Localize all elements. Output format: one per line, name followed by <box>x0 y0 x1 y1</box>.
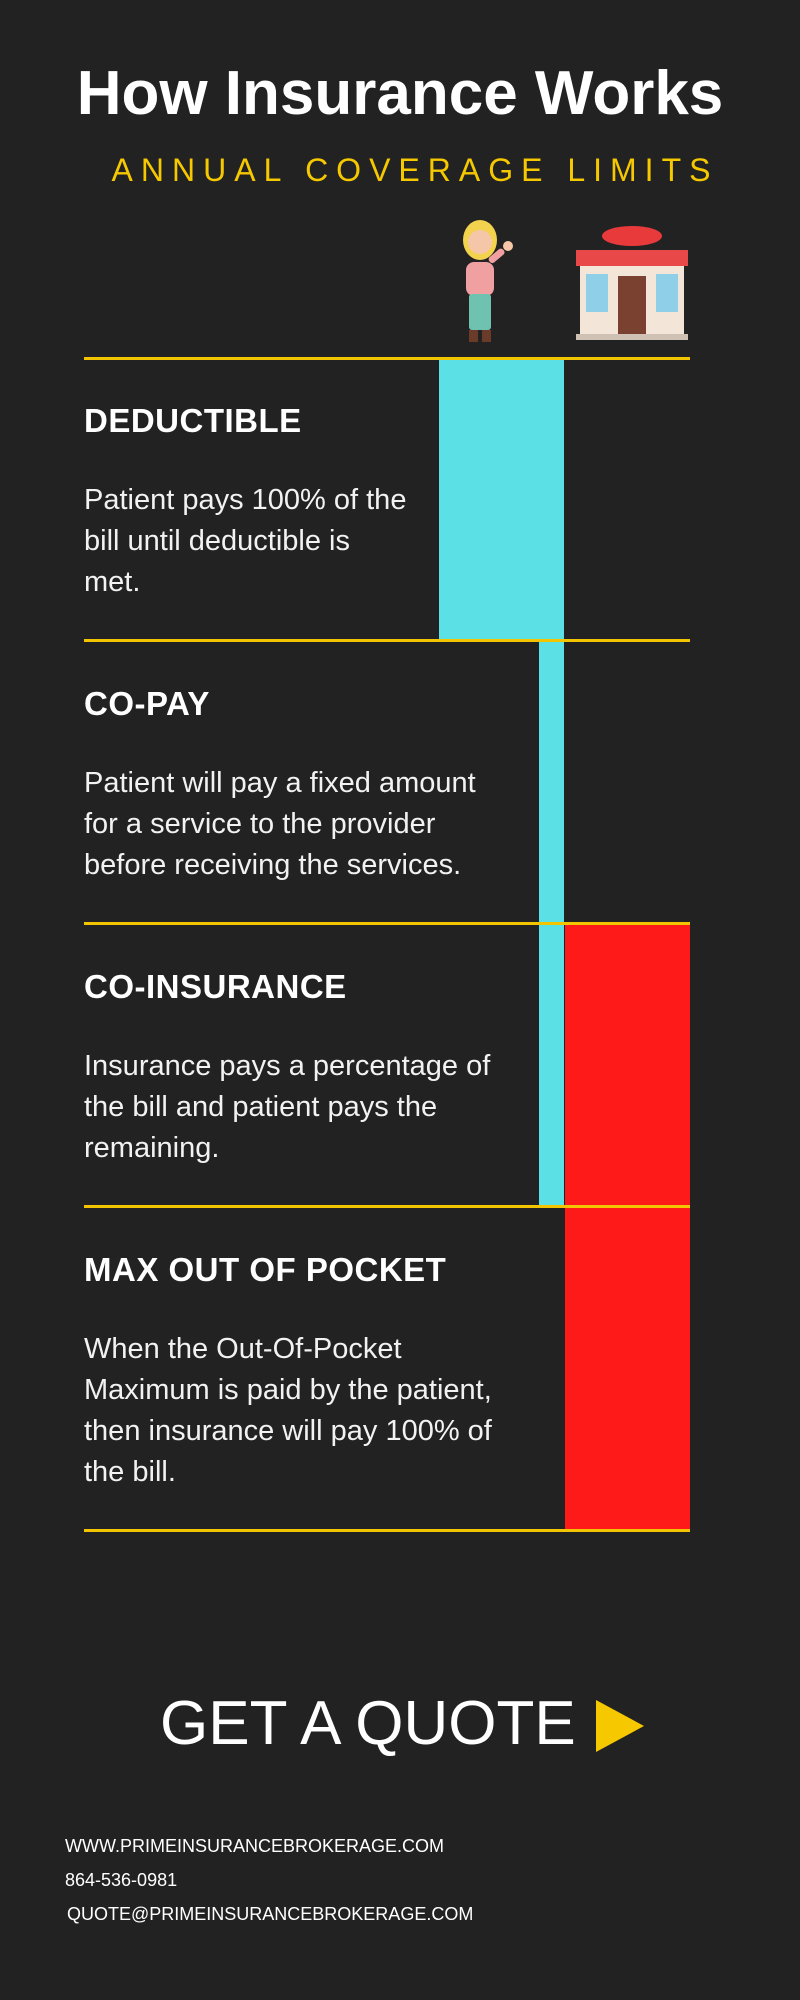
text: max out of pocket: the bill. <box>84 1456 176 1488</box>
text: max out of pocket: Maximum is paid by the patient, <box>84 1374 492 1406</box>
heading: co-insurance: CO-INSURANCE <box>84 968 347 1005</box>
text: co-pay <box>84 767 476 881</box>
text: deductible <box>84 484 406 598</box>
bar: deductible patient <box>439 360 564 640</box>
text: max out of pocket: When the Out-Of-Pocket <box>84 1333 402 1365</box>
text: co-insurance <box>84 1050 490 1164</box>
call to action: GET A QUOTE <box>160 1689 576 1758</box>
text: deductible: met. <box>84 566 140 598</box>
footer contacts: WWW.PRIMEINSURANCEBROKERAGE.COM <box>65 1836 444 1856</box>
bar: insurance <box>565 925 690 1531</box>
icon: woman <box>463 220 513 342</box>
bar: co-pay patient <box>539 641 564 1207</box>
text: deductible: Patient pays 100% of the <box>84 484 406 516</box>
heading: deductible: DEDUCTIBLE <box>84 402 302 439</box>
title: How Insurance Works <box>77 59 723 128</box>
text: max out of pocket: then insurance will pay 100% of <box>84 1415 492 1447</box>
text: max out of pocket <box>84 1333 492 1488</box>
subtitle: ANNUAL COVERAGE LIMITS <box>112 152 718 188</box>
footer contacts: QUOTE@PRIMEINSURANCEBROKERAGE.COM <box>67 1904 473 1924</box>
heading: max out of pocket: MAX OUT OF POCKET <box>84 1251 446 1288</box>
text: co-pay: for a service to the provider <box>84 808 435 840</box>
icon: store <box>576 226 688 340</box>
footer contacts <box>65 1836 473 1924</box>
text: co-insurance: Insurance pays a percentage of <box>84 1050 490 1082</box>
text: co-pay: Patient will pay a fixed amount <box>84 767 476 799</box>
footer contacts: 864-536-0981 <box>65 1870 177 1890</box>
text: co-pay: before receiving the services. <box>84 849 461 881</box>
text: deductible: bill until deductible is <box>84 525 350 557</box>
icon: arrow <box>596 1700 644 1752</box>
text: co-insurance: the bill and patient pays the <box>84 1091 437 1123</box>
heading: co-pay: CO-PAY <box>84 685 210 722</box>
text: co-insurance: remaining. <box>84 1132 219 1164</box>
